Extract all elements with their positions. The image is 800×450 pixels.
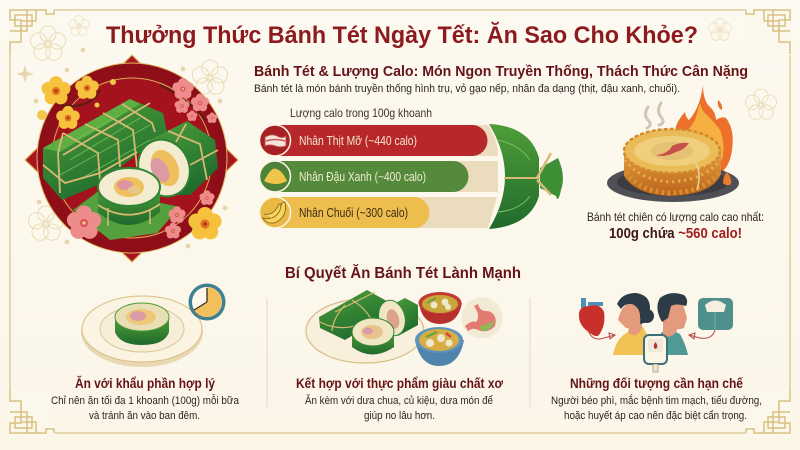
- tip text: hoặc huyết áp cao nên đặc biệt cẩn trọng.: [564, 410, 747, 422]
- icon: blue pickle bowl: [415, 327, 464, 366]
- bar: mung bean: [260, 161, 498, 192]
- panel: restricted groups: [551, 293, 762, 422]
- banana leaf: [73, 190, 180, 240]
- icon: plate with banh tet: [306, 290, 424, 363]
- fried note: Bánh tét chiên có lượng calo cao nhất:: [587, 210, 764, 224]
- tip text: Ăn kèm với dưa chua, củ kiệu, dưa món để: [305, 394, 493, 407]
- tip title: Những đối tượng cần hạn chế: [570, 375, 743, 391]
- bar: banana: Nhân Chuối (~300 calo): [299, 206, 408, 220]
- title: Thưởng Thức Bánh Tét Ngày Tết: Ăn Sao Cho Khỏe?: [106, 21, 698, 49]
- tip text: [51, 394, 240, 422]
- icon: man: [655, 293, 688, 355]
- tips heading: Bí Quyết Ăn Bánh Tét Lành Mạnh: [285, 265, 521, 282]
- fried banh tet illustration: [607, 85, 739, 202]
- icon: stomach: [462, 298, 502, 338]
- bar: meat: Nhân Thịt Mỡ (~440 calo): [299, 134, 417, 148]
- calorie bar chart shaped as banh tet: [260, 124, 563, 229]
- icon: bathroom scale: [689, 298, 733, 339]
- standing cut banh tet: [129, 121, 218, 205]
- panel: fiber: [296, 290, 503, 422]
- steam: [646, 103, 663, 128]
- intro paragraph: Bánh tét là món bánh truyền thống hình trụ, vỏ gạo nếp, nhân đa dạng (thịt, đậu xanh, chuối).: [254, 83, 680, 95]
- flame: [675, 85, 733, 172]
- tip text: Người béo phì, mắc bệnh tim mạch, tiểu đường,: [551, 394, 762, 407]
- chart title: Lượng calo trong 100g khoanh: [290, 106, 432, 120]
- tip text: [305, 394, 493, 422]
- bar: mung bean: Nhân Đậu Xanh (~400 calo): [299, 170, 426, 184]
- tip title: Ăn với khẩu phần hợp lý: [75, 375, 215, 391]
- icon: red pickle bowl: [418, 292, 462, 324]
- long banh tet log: [43, 99, 167, 200]
- tip title: Kết hợp với thực phẩm giàu chất xơ: [296, 375, 503, 391]
- hero illustration: banh tet on red medallion: [25, 55, 238, 262]
- tip text: và tránh ăn vào ban đêm.: [89, 410, 200, 422]
- tip text: [551, 394, 762, 422]
- plate: [607, 164, 739, 202]
- red diamond medallion: [25, 55, 238, 262]
- leaf cylinder end: [489, 124, 563, 229]
- icon: clock: [188, 284, 226, 320]
- bar: banana: [260, 197, 497, 228]
- branch and blossoms: [37, 76, 217, 129]
- lower blossoms: [67, 190, 222, 239]
- icon: heart: [579, 298, 615, 339]
- tip text: giúp no lâu hơn.: [364, 410, 435, 422]
- cake: [624, 152, 721, 196]
- icon: plate with slice: [81, 296, 203, 367]
- panel: portion: [51, 284, 240, 422]
- section heading: calories: Bánh Tét & Lượng Calo: Món Ngon Truyền Thống, Thách Thức Cân Nặng: [254, 63, 748, 80]
- column dividers: [267, 298, 530, 407]
- tip text: Chỉ nên ăn tối đa 1 khoanh (100g) mỗi bữa: [51, 394, 240, 407]
- front cut slice: [98, 168, 160, 226]
- icon: glucose meter: [644, 335, 667, 372]
- decorative outline flowers: [16, 16, 777, 248]
- fried callout number: 100g chứa ~560 calo!: [609, 225, 742, 242]
- bar: meat: [260, 125, 498, 156]
- icon: woman: [613, 293, 654, 355]
